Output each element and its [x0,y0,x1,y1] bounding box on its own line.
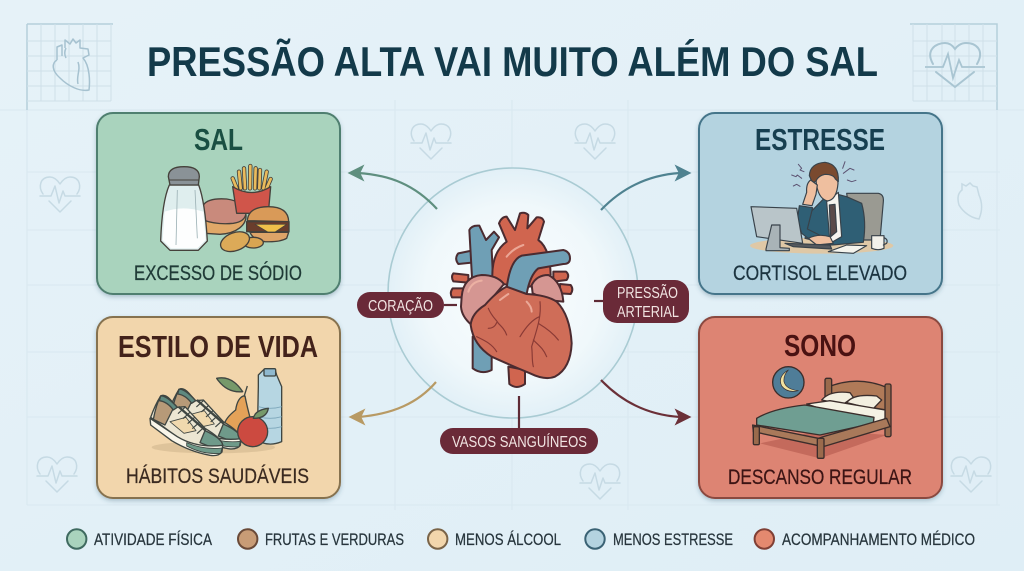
icon: faint heart bottom right [951,457,991,492]
icon: faint heart left [40,177,80,212]
legend item: menos estresse [585,529,733,549]
icon: stressed man at laptop [750,162,893,254]
icon: faint heart bottom centre [580,464,620,499]
label: vasos sanguíneos: VASOS SANGUÍNEOS [452,432,587,451]
legend item: atividade física [67,529,212,549]
panel: sono [699,317,942,498]
label: coração: CORAÇÃO [368,295,433,315]
panel: sal [97,113,340,294]
central circle [388,168,638,418]
icon: moon and bed [753,367,891,458]
icon: faint anatomical heart right [958,183,982,219]
legend item: menos álcool [428,529,561,549]
icon: faint heart top centre right [575,124,615,159]
text: hábitos saudáveis: HÁBITOS SAUDÁVEIS [126,465,309,488]
icon: faint heart top centre left [411,124,451,159]
arrow: to sono [601,380,689,423]
heading: sal: SAL [194,122,243,157]
heading: estresse: ESTRESSE [755,122,885,157]
legend item: acompanhamento médico [755,529,975,549]
legend item: frutas e verduras: FRUTAS E VERDURAS [265,531,404,549]
heading: sono: SONO [784,328,856,363]
icon: sneakers, fruit and water bottle [150,369,282,456]
legend item: acompanhamento médico: ACOMPANHAMENTO MÉDICO [782,530,975,549]
label: coração [357,292,457,318]
legend item: atividade física: ATIVIDADE FÍSICA [94,530,212,549]
icon: faint heart bottom left [37,457,77,492]
icon: corner grid with ECG heart [910,24,997,110]
label: pressão arterial [594,280,689,323]
text: descanso regular: DESCANSO REGULAR [728,466,912,489]
panel: estresse [699,113,942,294]
panel: estilo de vida [97,317,340,498]
heading: estilo de vida: ESTILO DE VIDA [118,329,318,364]
text: cortisol elevado: CORTISOL ELEVADO [733,262,907,285]
label: pressão arterial: ARTERIAL [617,304,679,321]
label: pressão arterial: PRESSÃO [617,282,678,302]
label: vasos sanguíneos [440,396,598,454]
legend item: frutas e verduras [238,529,404,549]
arrow: to estresse [601,167,689,210]
legend item: menos estresse: MENOS ESTRESSE [613,531,733,549]
arrow: to estilo de vida [351,382,436,423]
icon: corner grid with anatomical heart [27,24,113,110]
heart illustration [451,213,572,387]
icon: salt shaker and fast food [161,166,289,255]
text: excesso de sódio: EXCESSO DE SÓDIO [134,262,302,285]
legend item: menos álcool: MENOS ÁLCOOL [455,530,561,549]
legend [67,529,975,549]
title: PRESSÃO ALTA VAI MUITO ALÉM DO SAL [147,38,878,85]
arrow: to sal [350,167,437,209]
